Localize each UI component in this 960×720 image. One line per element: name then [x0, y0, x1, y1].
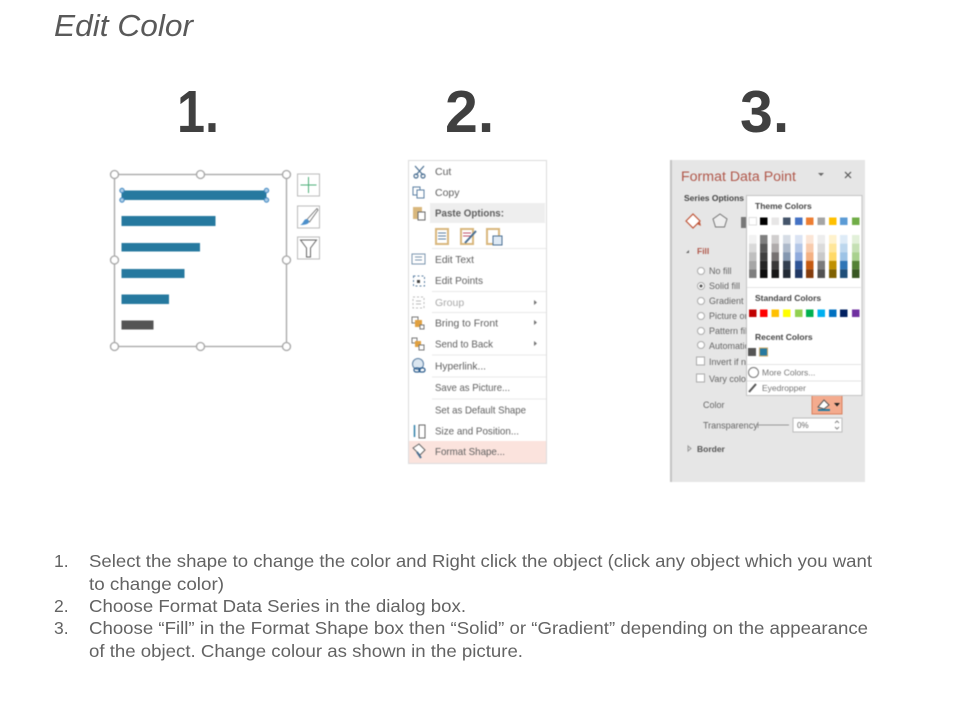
theme colour row: [749, 218, 860, 225]
menu background: [408, 160, 546, 464]
series options label: Series Options: [684, 193, 744, 203]
fill radio options: Vary colors: [709, 374, 754, 384]
step 3 text: [54, 618, 868, 661]
menu labels: [435, 166, 526, 458]
eyedropper item: Eyedropper: [762, 383, 806, 393]
fill section heading: Fill: [697, 246, 709, 256]
step 1 text: Select the shape to change the color and Right click the object (click any object which you want: [89, 551, 872, 571]
pane title: Format Data Point: [681, 169, 796, 184]
chart selection frame: [110, 170, 290, 350]
border section: Border: [697, 444, 726, 454]
panel: selected bar chart: [110, 170, 320, 350]
menu labels: Send to Back: [435, 338, 494, 350]
icon: hyperlink: [412, 358, 425, 372]
standard colors heading: Standard Colors: [755, 293, 821, 303]
fill radio options: [696, 266, 754, 384]
colour picker popup: [746, 196, 862, 396]
paste options header: [430, 203, 545, 223]
icon: fill tab: [686, 214, 701, 228]
icon: chart styles brush: [298, 206, 320, 228]
pane background: [670, 160, 865, 482]
transparency control: 0%: [797, 421, 809, 430]
fill section heading: [686, 246, 709, 256]
icon: size and position: [414, 425, 425, 438]
menu labels: Cut: [435, 166, 451, 178]
recent colour swatches: [748, 348, 768, 356]
fill radio options: Gradient fi: [709, 296, 751, 306]
fill radio options: Invert if ne: [709, 357, 751, 367]
step 3 text: of the object. Change colour as shown in the picture.: [89, 641, 523, 661]
step 3 text: 3.: [54, 618, 69, 638]
icon: edit text: [412, 254, 425, 264]
icon: chart filter funnel: [298, 237, 320, 259]
submenu arrows: [534, 300, 537, 346]
theme colour shades: [749, 235, 860, 278]
standard colour row: [749, 310, 860, 317]
step number 3: 3.: [740, 79, 789, 145]
color control: Color: [703, 400, 725, 410]
menu labels: Format Shape...: [435, 446, 505, 458]
step number 2: 2.: [445, 79, 494, 145]
icon: chart elements plus: [298, 174, 320, 196]
icon: bring to front: [412, 317, 424, 329]
step 2 text: Choose Format Data Series in the dialog box.: [89, 596, 466, 616]
step 2 text: 2.: [54, 596, 69, 616]
step 1 text: 1.: [54, 551, 69, 571]
fill radio options: Solid fill: [709, 281, 740, 291]
more colors item: More Colors...: [762, 368, 815, 378]
panel: format data point: [670, 160, 865, 482]
icon: paste: [413, 207, 425, 220]
icons: paste options: [436, 229, 502, 245]
menu labels: Copy: [435, 187, 460, 199]
icon: size tab: [741, 217, 746, 228]
icon: send to back: [412, 338, 424, 350]
step 3 text: Choose “Fill” in the Format Shape box then “Solid” or “Gradient” depending on the appearance: [89, 618, 868, 638]
menu labels: Hyperlink...: [435, 360, 486, 372]
menu labels: Bring to Front: [435, 318, 498, 330]
fill radio options: No fill: [709, 266, 732, 276]
icon: format shape: [413, 444, 425, 458]
step 1 text: to change color): [89, 574, 224, 594]
menu labels: Edit Text: [435, 254, 474, 266]
panel: context menu: [408, 160, 546, 464]
icon: cut: [414, 166, 425, 178]
icon: copy: [413, 187, 424, 198]
icon: effects pentagon: [713, 214, 727, 227]
step 1 text: [54, 551, 872, 594]
transparency control: [703, 418, 842, 432]
title: Edit Color: [54, 8, 195, 43]
fill radio options: Automatic: [709, 341, 750, 351]
menu labels: Set as Default Shape: [435, 404, 526, 416]
fill radio options: Picture or: [709, 311, 748, 321]
pane controls: [818, 172, 851, 178]
instructions list: [54, 551, 872, 661]
icon: group: [413, 297, 424, 308]
recent colors heading: Recent Colors: [755, 332, 813, 342]
icon: edit points: [414, 276, 424, 286]
menu labels: Group: [435, 297, 464, 309]
menu labels: Save as Picture...: [435, 382, 510, 394]
transparency control: Transparency: [703, 420, 758, 430]
menu labels: Paste Options:: [435, 208, 504, 220]
theme colors heading: Theme Colors: [755, 201, 812, 211]
step number 1: 1.: [177, 79, 219, 145]
color control: [703, 395, 842, 414]
format shape highlight: [409, 441, 546, 463]
menu labels: Edit Points: [435, 275, 483, 287]
fill radio options: Pattern fill: [709, 326, 749, 336]
bar chart: [120, 188, 269, 330]
menu labels: Size and Position...: [435, 426, 519, 438]
